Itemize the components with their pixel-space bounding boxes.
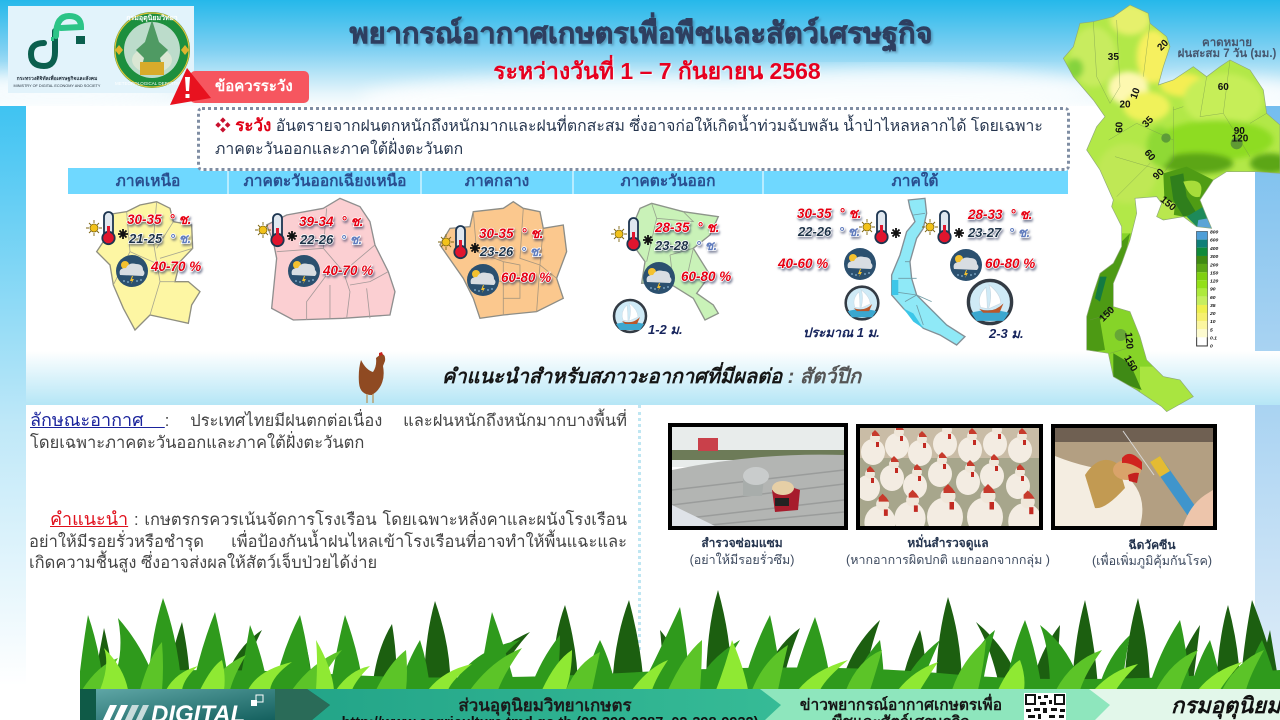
region: central	[438, 202, 567, 318]
map legend: 300	[1210, 254, 1219, 260]
caption 3	[1092, 538, 1212, 569]
caption 1	[690, 536, 794, 567]
map contour labels: 35	[1108, 52, 1119, 63]
map legend: 0.1	[1210, 335, 1217, 341]
map legend: 35	[1210, 303, 1216, 309]
caption 2	[846, 534, 1050, 568]
region: central: 60-80 %	[501, 270, 551, 285]
map contour labels: 60	[1142, 148, 1157, 164]
rainfall map of Thailand	[1063, 4, 1280, 412]
map legend: 120	[1210, 279, 1219, 285]
agro-meteorology division contact	[342, 696, 759, 720]
weather description text: ลักษณะอากาศ : ประเทศไทยมีฝนตกต่อเนื่อง และฝนหนักถึงหนักมากบางพื้นที่	[30, 410, 627, 430]
region header bar: ภาคตะวันออกเฉียงเหนือ	[244, 172, 406, 190]
icon: meteorological department seal	[114, 12, 190, 88]
region: south	[777, 198, 1035, 345]
map legend title: คาดหมาย	[1202, 37, 1252, 49]
caption 3: ฉีดวัคซีน	[1128, 538, 1176, 552]
map contour labels: 150	[1121, 354, 1139, 374]
map legend: 600	[1210, 238, 1219, 244]
title: พยากรณ์อากาศเกษตรเพื่อพืชและสัตว์เศรษฐกิจ	[349, 18, 933, 50]
map contour labels: 60	[1218, 82, 1229, 93]
region: northeast	[255, 198, 395, 320]
icon: ministry logo	[14, 16, 101, 88]
recommendation text: อย่าให้มีรอยรั่วหรือชำรุด เพื่อป้องกันน้ำฝนไหลเข้าโรงเรือนที่อาจทำให้พื้นแฉะและ	[29, 532, 627, 550]
region header bar: ภาคกลาง	[465, 173, 529, 190]
region: south: 40-60 %	[777, 256, 828, 271]
region: east: 23-28 ° ช.	[654, 238, 717, 253]
photo: roof inspection	[672, 427, 844, 526]
region: south: 22-26 ° ช.	[797, 224, 860, 239]
region: south: 28-33 ° ช.	[967, 207, 1032, 222]
map contour labels: 20	[1155, 37, 1171, 53]
caption 2: (หากอาการผิดปกติ แยกออกจากกลุ่ม )	[846, 553, 1050, 568]
map legend: 10	[1210, 319, 1216, 325]
map contour labels: 60	[1114, 121, 1125, 133]
photos and captions	[668, 423, 1217, 568]
warning tag: ข้อควรระวัง	[215, 78, 293, 95]
icon: meteorological department seal: กรมอุตุนิยมวิทยา	[126, 14, 178, 22]
warning tag	[170, 68, 309, 105]
map legend title: ฝนสะสม 7 วัน (มม.)	[1178, 47, 1277, 60]
region header bar	[68, 168, 1068, 194]
region: east: 1-2 ม.	[648, 322, 683, 337]
photo: vaccination	[1055, 428, 1213, 526]
map contour labels: 20	[1119, 99, 1131, 110]
advice heading text: คำแนะนำสำหรับสภาวะอากาศที่มีผลต่อ : สัตว์ปีก	[442, 366, 861, 388]
map legend: 150	[1210, 270, 1219, 276]
icon: meteorological department seal: METEOROLOGICAL DEPARTMENT	[115, 81, 189, 86]
agro-meteorology division contact: ส่วนอุตุนิยมวิทยาเกษตร	[458, 696, 633, 716]
region: northeast: 39-34 ° ช.	[299, 214, 363, 229]
region: north: 40-70 %	[150, 259, 201, 274]
region: central: 30-35 ° ช.	[479, 226, 543, 241]
weather description text	[30, 408, 627, 452]
map contour labels: 90	[1234, 126, 1245, 137]
map legend: 60	[1210, 295, 1216, 301]
region: central: 23-26 ° ช.	[479, 244, 542, 259]
recommendation text	[29, 509, 627, 572]
icon: warning triangle	[170, 68, 211, 105]
region: south: ประมาณ 1 ม.	[803, 325, 880, 340]
map contour labels: 120	[1232, 134, 1249, 145]
region: north	[86, 202, 201, 330]
caption 3: (เพื่อเพิ่มภูมิคุ้มกันโรค)	[1092, 552, 1212, 569]
region: east: 28-35 ° ช.	[654, 220, 719, 235]
warning text: ❖ ระวัง อันตรายจากฝนตกหนักถึงหนักมากและฝนที่ตกสะสม ซึ่งอาจก่อให้เกิดน้ำท่วมฉับพลัน น้ำป่าไหลหลากได้ โดยเฉพาะ	[215, 116, 1043, 135]
map contour labels: 150	[1097, 304, 1117, 324]
region: south: 23-27 ° ช.	[967, 225, 1030, 240]
map legend: 0	[1210, 344, 1213, 350]
map legend: 200	[1209, 262, 1219, 268]
map contour labels: 150	[1158, 194, 1178, 214]
region: northeast: 40-70 %	[322, 263, 373, 278]
warning text: ภาคตะวันออกและภาคใต้ฝั่งตะวันตก	[215, 141, 463, 158]
subtitle: date range: ระหว่างวันที่ 1 – 7 กันยายน 2568	[493, 58, 821, 84]
news text	[800, 693, 1002, 720]
icon: ministry logo: กระทรวงดิจิทัลเพื่อเศรษฐกิจและสังคม	[17, 74, 97, 82]
warning box	[197, 107, 1070, 171]
map legend: 400	[1209, 246, 1219, 252]
region header bar: ภาคตะวันออก	[621, 173, 715, 190]
map legend title	[1178, 37, 1277, 60]
region: northeast: 22-26 ° ช.	[299, 232, 362, 247]
map contour labels	[1097, 37, 1249, 374]
icon: ministry logo: MINISTRY OF DIGITAL ECONOMY AND SOCIETY	[14, 84, 101, 88]
digital logo	[96, 689, 275, 720]
caption 2: หมั่นสำรวจดูแล	[907, 534, 989, 551]
divider column	[638, 405, 641, 650]
photo: chickens	[860, 428, 1039, 526]
grass strip	[80, 590, 1280, 689]
region: north: 30-35 ° ช.	[127, 212, 191, 227]
caption 1: สำรวจซ่อมแซม	[701, 536, 783, 550]
recommendation text: เกิดความชื้นสูง ซึ่งอาจส่งผลให้สัตว์เจ็บป่วยได้ง่าย	[29, 554, 377, 572]
caption 1: (อย่าให้มีรอยรั่วซึม)	[690, 551, 794, 567]
region: north: 21-25 ° ช.	[128, 231, 191, 246]
region: south: 60-80 %	[985, 256, 1035, 271]
recommendation text: คำแนะนำ : เกษตรกรควรเน้นจัดการโรงเรือน โดยเฉพาะหลังคาและผนังโรงเรือน	[50, 509, 627, 529]
map contour labels: 35	[1140, 114, 1156, 130]
map legend: 800	[1210, 230, 1219, 236]
icon: hen	[359, 352, 385, 403]
qr code	[1024, 693, 1066, 720]
map legend: 90	[1210, 287, 1216, 293]
map legend	[1197, 230, 1219, 350]
map contour labels: 90	[1151, 166, 1167, 182]
region: east	[611, 203, 731, 337]
region: south: 30-35 ° ช.	[797, 206, 861, 221]
news text: ข่าวพยากรณ์อากาศเกษตรเพื่อ	[800, 693, 1002, 714]
map contour labels: 120	[1122, 332, 1135, 350]
region header bar: ภาคเหนือ	[116, 172, 180, 190]
weather description text: โดยเฉพาะภาคตะวันออกและภาคใต้ฝั่งตะวันตก	[30, 434, 364, 452]
region: south: 2-3 ม.	[988, 326, 1024, 341]
map contour labels: 10	[1129, 86, 1143, 101]
warning text	[215, 114, 1043, 158]
map legend: 5	[1210, 327, 1213, 333]
map legend: 20	[1209, 311, 1216, 317]
region header bar: ภาคใต้	[892, 171, 938, 190]
region: east: 60-80 %	[681, 269, 731, 284]
